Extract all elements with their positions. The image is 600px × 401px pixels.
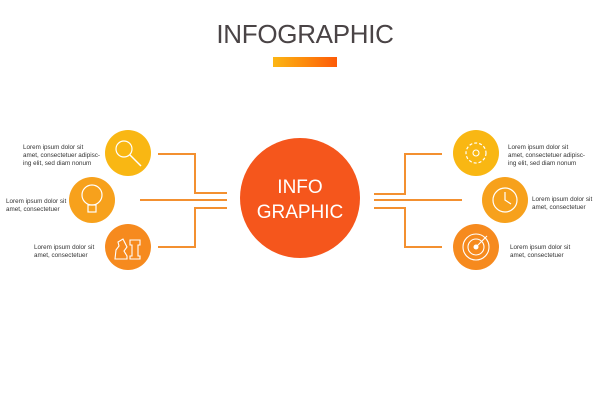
text: right middle: amet, consectetuer (532, 204, 586, 211)
text: right top: amet, consectetuer adipisc- (508, 152, 585, 159)
text: left bottom (34, 244, 94, 259)
text: right top: ing elit, sed diam nonum (508, 160, 576, 167)
icon: chess (105, 224, 151, 270)
text: left middle (6, 198, 66, 213)
text: left top (23, 144, 100, 167)
text: right bottom (510, 244, 570, 259)
text: right top (508, 144, 585, 167)
central circle: GRAPHIC (257, 202, 343, 223)
text: left bottom: Lorem ipsum dolor sit (34, 244, 94, 251)
text: left middle: Lorem ipsum dolor sit (6, 198, 66, 205)
text: right middle (532, 196, 592, 211)
text: right middle: Lorem ipsum dolor sit (532, 196, 592, 203)
title underline bar (273, 57, 337, 67)
connector lines right (374, 154, 462, 247)
icon: gear (453, 130, 499, 176)
text: left middle: amet, consectetuer (6, 206, 60, 213)
connector lines left (140, 154, 227, 247)
icon: magnifier (105, 130, 151, 176)
icon: target (453, 224, 499, 270)
text: right top: Lorem ipsum dolor sit (508, 144, 568, 151)
central circle (240, 138, 360, 258)
icon: clock (482, 177, 528, 223)
title: INFOGRAPHIC (216, 19, 394, 49)
icon: bulb (69, 177, 115, 223)
text: right bottom: Lorem ipsum dolor sit (510, 244, 570, 251)
text: right bottom: amet, consectetuer (510, 252, 564, 259)
text: left top: amet, consectetuer adipisc- (23, 152, 100, 159)
text: left bottom: amet, consectetuer (34, 252, 88, 259)
text: left top: ing elit, sed diam nonum (23, 160, 91, 167)
central circle: INFO (277, 177, 323, 198)
text: left top: Lorem ipsum dolor sit (23, 144, 83, 151)
